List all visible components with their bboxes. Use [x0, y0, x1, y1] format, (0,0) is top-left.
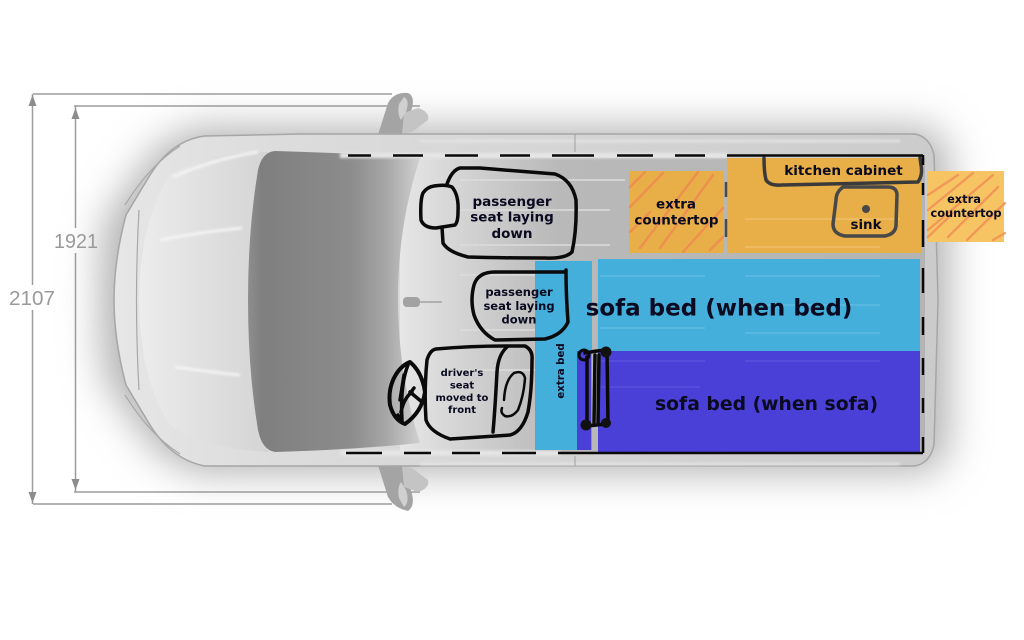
zone: sofa bed when sofa: [598, 351, 920, 452]
zone: extra countertop outside: countertop: [930, 206, 1002, 220]
label: extra: [656, 196, 696, 212]
blue sofa overlap: [577, 351, 591, 450]
label: extra: [947, 192, 981, 206]
dimension: overall width with mirrors 2107: 2107: [9, 288, 55, 310]
label: passenger: [485, 285, 553, 299]
driver's seat moved to front: [425, 346, 532, 439]
zone: extra countertop inside: countertop: [634, 212, 719, 228]
passenger seat laying down, upper: down: [491, 226, 533, 242]
passenger seat laying down, lower: down: [502, 312, 536, 326]
passenger seat laying down, upper: [421, 168, 576, 258]
label: extra bed: extra bed: [556, 343, 567, 399]
dimension: body width 1921: 1921: [54, 231, 98, 253]
icon: rear-view mirror: [403, 297, 442, 307]
dimension: body width 1921: [54, 106, 420, 492]
label: sofa bed when bed: sofa bed (when bed): [586, 296, 852, 322]
headrest: [421, 185, 458, 228]
icon: bottom wing mirror: [377, 462, 428, 511]
van drop shadow: [101, 128, 948, 472]
zone: extra countertop inside: [629, 171, 724, 253]
driver's seat moved to front: front: [448, 405, 476, 416]
zone: extra bed: [535, 261, 592, 450]
icon: top wing mirror: [377, 93, 428, 138]
label: passenger: [472, 194, 552, 210]
floor streaks: [460, 180, 625, 370]
driver's seat moved to front: seat: [450, 380, 474, 392]
driver's seat moved to front: moved to: [436, 393, 489, 404]
passenger seat laying down, lower: seat laying: [483, 299, 555, 313]
zone: sofa bed when bed: [586, 259, 920, 351]
label: kitchen cabinet: kitchen cabinet: [784, 163, 903, 179]
side rails: [420, 141, 900, 464]
hatch lines: [928, 173, 1005, 240]
icon: sofa bed frame: [579, 346, 612, 430]
sink: [833, 187, 897, 236]
seat detail: [501, 372, 525, 416]
hatch lines: [630, 172, 723, 252]
cargo floor: [400, 158, 925, 452]
sink: sink: [850, 218, 883, 233]
zone: kitchen block: [727, 158, 922, 253]
van body seen from above: [114, 93, 938, 511]
kitchen cabinet outline: [764, 158, 922, 185]
passenger seat laying down, lower: [472, 270, 568, 340]
dimension: overall width with mirrors 2107: [9, 94, 392, 504]
label: sofa bed when sofa: sofa bed (when sofa): [655, 394, 878, 415]
label: driver's: [441, 368, 483, 379]
backrest: [493, 347, 507, 432]
bonnet: [139, 152, 268, 452]
passenger seat laying down, upper: seat laying: [470, 210, 554, 226]
body shell: [114, 134, 938, 466]
dashed outline of the living space: [346, 155, 923, 453]
windscreen: [248, 151, 420, 452]
icon: steering wheel: [390, 362, 425, 424]
zone: extra countertop outside: [927, 171, 1005, 242]
